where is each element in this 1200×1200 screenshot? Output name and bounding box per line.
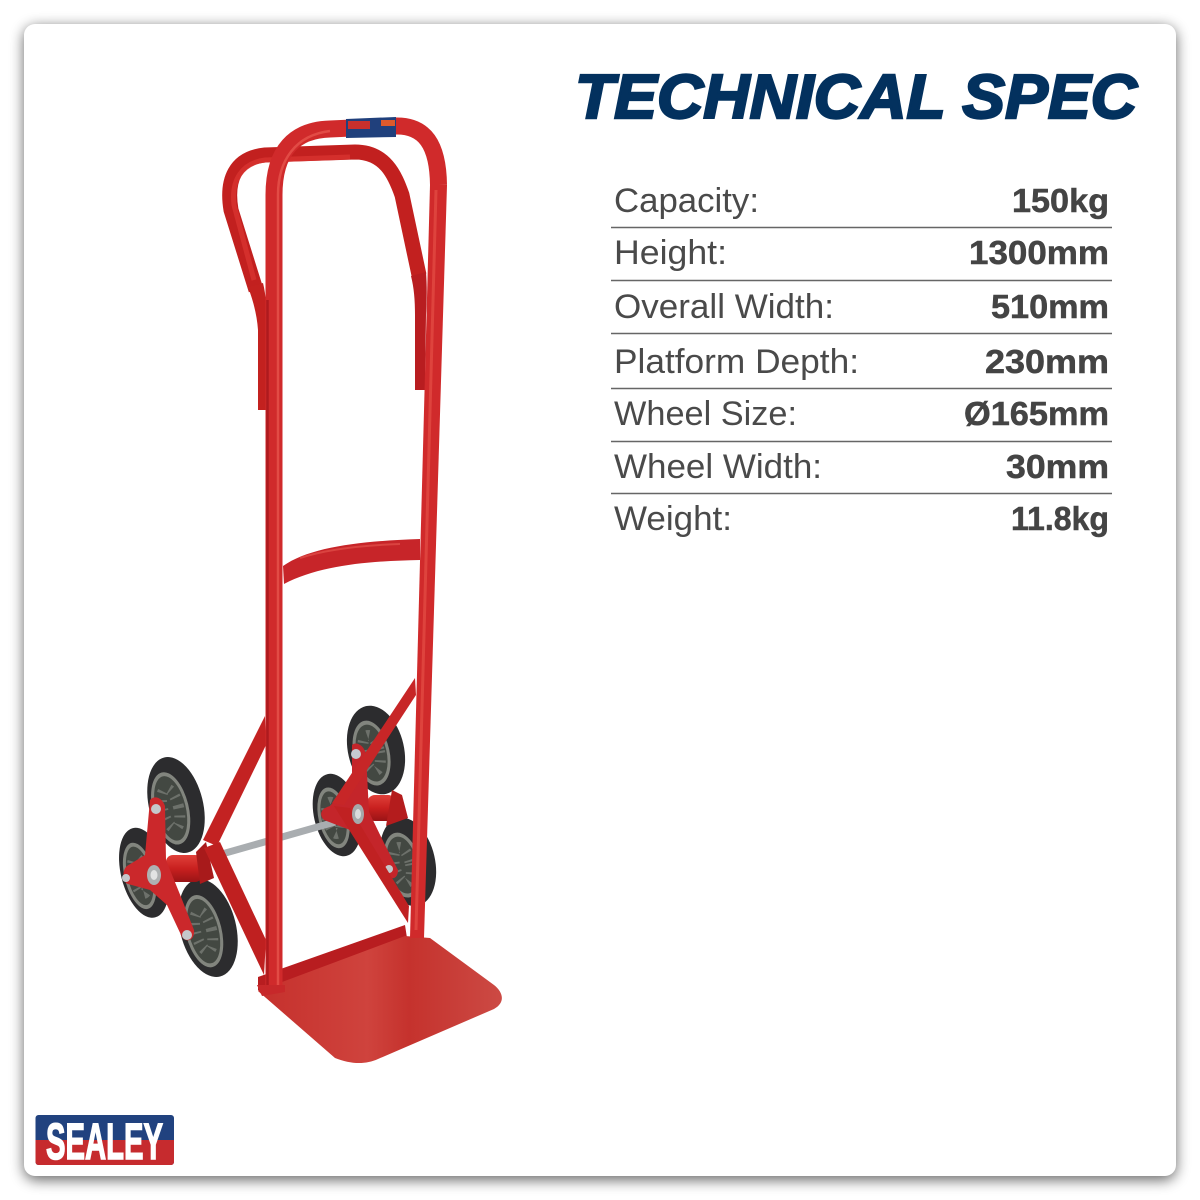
row: platform depth xyxy=(614,343,1109,381)
row: overall width xyxy=(614,288,1109,326)
row: overall width: 510mm xyxy=(991,288,1109,325)
hub cylinders xyxy=(166,790,408,884)
title: TECHNICAL SPEC xyxy=(575,63,1138,132)
product: stair climbing sack truck xyxy=(111,117,502,1063)
row: weight: 11.8kg xyxy=(1011,500,1109,537)
row: wheel width xyxy=(614,448,1109,486)
row: height: 1300mm xyxy=(969,234,1109,271)
row: height xyxy=(614,234,1109,272)
platform xyxy=(258,936,502,1063)
axle xyxy=(222,822,335,854)
lower braces xyxy=(203,716,266,975)
row: wheel width: Wheel Width: xyxy=(614,448,822,486)
row: weight xyxy=(614,500,1109,538)
spec table xyxy=(611,182,1112,538)
logo: Sealey xyxy=(36,1113,174,1170)
row: wheel width: 30mm xyxy=(1006,448,1109,485)
main frame tube xyxy=(257,126,447,996)
wheels, left set xyxy=(111,751,247,983)
rear handle tube xyxy=(230,152,427,410)
row: overall width: Overall Width: xyxy=(614,288,834,326)
star bracket right xyxy=(321,678,416,923)
row: wheel size xyxy=(614,395,1109,433)
row: wheel size: Wheel Size: xyxy=(614,395,797,433)
row: weight: Weight: xyxy=(614,500,732,538)
crossbar xyxy=(283,539,420,584)
star bracket left xyxy=(122,797,194,940)
row: height: Height: xyxy=(614,234,727,272)
row: capacity: 150kg xyxy=(1012,182,1109,219)
handle label xyxy=(346,117,396,138)
row: platform depth: 230mm xyxy=(985,343,1109,380)
logo: Sealey: SEALEY xyxy=(46,1113,163,1170)
row: capacity: Capacity: xyxy=(614,182,759,220)
row: wheel size: Ø165mm xyxy=(964,395,1109,432)
platform back plate xyxy=(258,925,407,995)
row: capacity xyxy=(614,182,1109,220)
rear wheels, right set xyxy=(305,700,444,912)
row: platform depth: Platform Depth: xyxy=(614,343,859,381)
